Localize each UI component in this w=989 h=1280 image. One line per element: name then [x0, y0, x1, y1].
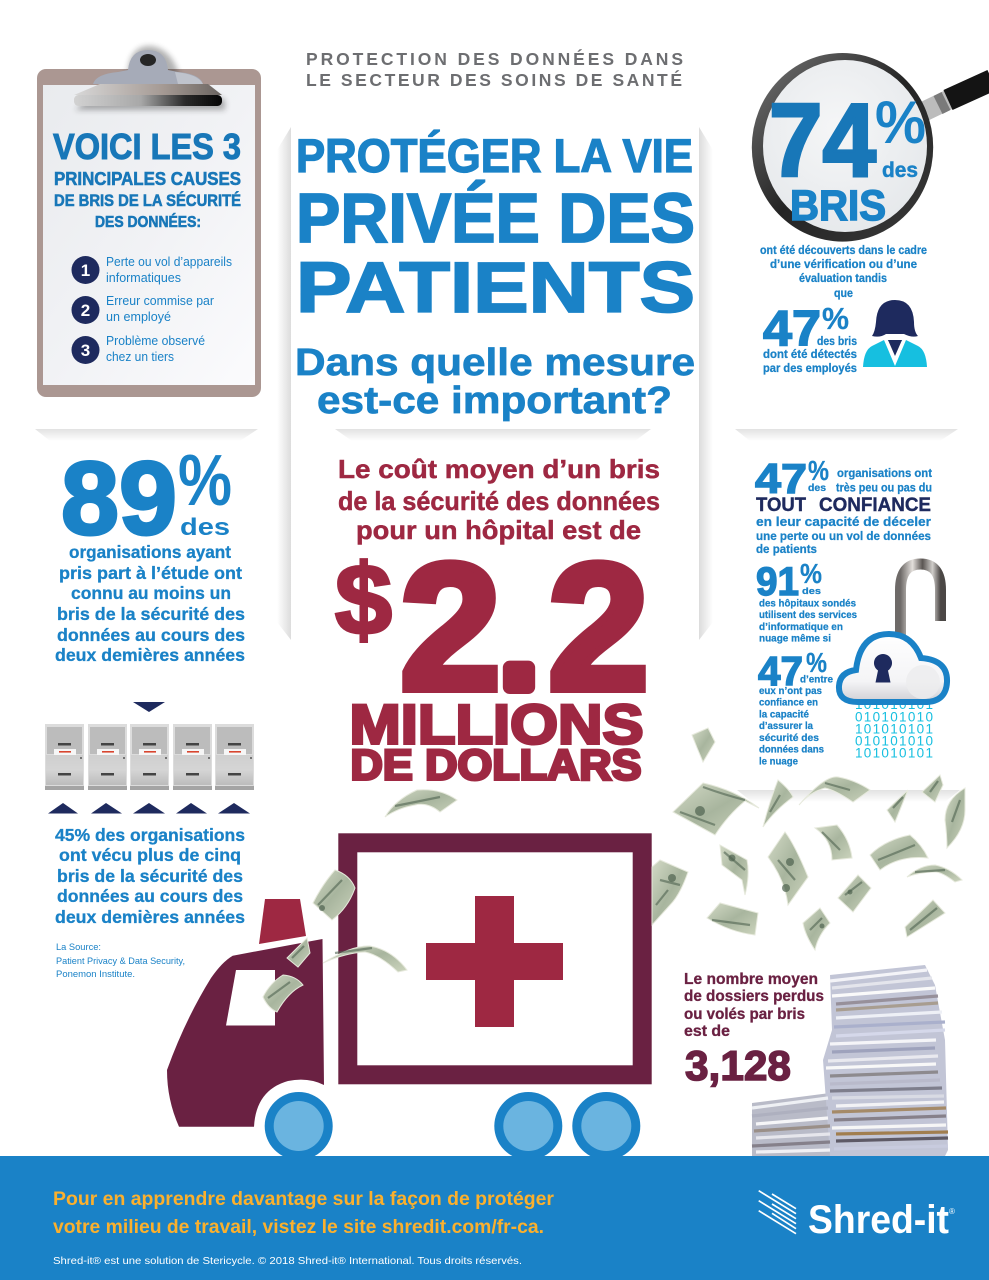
panel: 91% hospitals: des: [802, 586, 821, 597]
binary data: 010101010: [855, 734, 933, 748]
subtitle: [295, 342, 695, 422]
de dollars: DE DOLLARS: [350, 742, 642, 790]
paragraph: connu au moins un: [71, 583, 231, 603]
clipboard board: [37, 69, 261, 397]
stat: 47% detected by employees: des bris: [817, 336, 857, 348]
text: average lost records: Le nombre moyen: [684, 971, 818, 988]
binary data: 101010101: [855, 697, 933, 712]
magnifier handle: [925, 80, 989, 111]
clipboard heading: VOICI LES 3: [53, 126, 241, 167]
cause 3: 3: [81, 341, 90, 360]
footer legal: Shred-it® est une solution de Stericycle. © 2018 Shred-it® International. Tous droits réservés.: [53, 1255, 522, 1267]
Shred-it logo: [759, 1191, 955, 1242]
text: average lost records: de dossiers perdus: [684, 988, 824, 1005]
text: average lost records: est de: [684, 1023, 730, 1040]
cab: [167, 939, 324, 1127]
footer call to action: [53, 1189, 555, 1238]
main title: PATIENTS: [296, 249, 695, 328]
cause 1: 1: [81, 261, 90, 280]
red cross: [426, 896, 563, 1027]
cloud: [839, 634, 947, 702]
cost intro: de la sécurité des données: [338, 486, 660, 516]
text: 45% of organisations: bris de la sécurité des: [57, 866, 243, 886]
panel: cost of a breach: [335, 454, 660, 790]
magnifier lens: [752, 53, 933, 242]
arrows up: [48, 803, 250, 814]
panel: 47% cloud confidence: confiance en: [759, 696, 818, 708]
panel: 47% cloud confidence: %: [806, 647, 827, 678]
text: breaches discovered in audit: que: [834, 288, 853, 300]
main title: PROTÉGER LA VIE: [296, 129, 693, 182]
panel: 47% confidence: des: [808, 482, 826, 494]
cause 3: Problème observé: [106, 333, 205, 348]
icon: ambulance truck: [167, 833, 652, 1160]
panel: 47% confidence: CONFIANCE: [819, 494, 931, 516]
percent sign: %: [178, 441, 232, 521]
stat number 89: 89: [61, 441, 177, 557]
top heading: PROTECTION DES DONNÉES DANS: [306, 48, 683, 69]
panel: 47% cloud confidence: la capacité: [759, 708, 809, 720]
value 2.2: .: [501, 569, 537, 715]
panel: 47% cloud confidence: données dans: [759, 744, 824, 756]
subtitle: est-ce important?: [317, 380, 672, 422]
panel: 47% cloud confidence: [758, 647, 833, 768]
text: breaches discovered in audit: évaluation tandis: [799, 273, 887, 285]
stat: 74%: BRIS: [790, 182, 886, 230]
subtitle: Dans quelle mesure: [295, 342, 695, 384]
binary data: 101010101: [855, 746, 933, 760]
panel: 91% hospitals: nuage même si: [759, 632, 831, 644]
stat: 47% detected by employees: 47: [763, 300, 821, 356]
panel: 47% cloud confidence: sécurité des: [759, 732, 819, 744]
label des: des: [180, 514, 230, 541]
clipboard clip: [74, 46, 225, 110]
text: average lost records: [684, 971, 824, 1040]
clipboard heading: DE BRIS DE LA SÉCURITÉ: [54, 191, 241, 210]
cost intro: [338, 454, 660, 545]
stat: 47% detected by employees: [763, 300, 857, 375]
panel: 91% hospitals: 91: [756, 560, 799, 604]
panel: clipboard with 3 causes: [37, 46, 261, 397]
text: breaches discovered in audit: d’une vérification ou d’une: [770, 259, 917, 271]
source note: Patient Privacy & Data Security,: [56, 956, 185, 967]
stat: 47% detected by employees: %: [822, 301, 849, 336]
paragraph: organisations ayant: [69, 542, 231, 562]
panel: 47% cloud confidence: eux n’ont pas: [759, 685, 822, 697]
cost intro: pour un hôpital est de: [356, 515, 641, 545]
cause 2: 2: [81, 301, 90, 320]
text: 45% of organisations: deux demières années: [55, 907, 245, 927]
cabinets: [45, 724, 254, 790]
top heading: [306, 48, 683, 90]
source note: La Source:: [56, 942, 101, 953]
cause 1: [72, 254, 232, 285]
icon: employee: [863, 300, 927, 367]
stat: 74%: %: [875, 89, 926, 156]
dollar sign: $: [335, 544, 392, 656]
panel: 47% cloud confidence: le nuage: [759, 756, 798, 768]
panel: 91% hospitals: %: [800, 558, 822, 589]
cause 3: [72, 333, 205, 364]
panel shadows: [35, 127, 960, 802]
icon: stacks of paper: [752, 965, 948, 1156]
cause 1: informatiques: [106, 270, 181, 285]
panel: 47% confidence: une perte ou un vol de données: [756, 529, 931, 543]
beacon light: [259, 899, 306, 944]
panel: 91% hospitals: [756, 558, 857, 644]
main title: [296, 129, 695, 328]
cause 1: Perte ou vol d’appareils: [106, 254, 232, 269]
icon: cloud padlock with binary data: [839, 564, 947, 760]
paragraph: [55, 542, 245, 665]
text: average lost records: ou volés par bris: [684, 1006, 805, 1023]
cause 2: [72, 293, 215, 324]
binary data: [855, 697, 933, 760]
top heading: LE SECTEUR DES SOINS DE SANTÉ: [306, 69, 682, 90]
millions: MILLIONS: [350, 692, 644, 756]
panel: 47% cloud confidence: d’entre: [800, 674, 833, 686]
stat: 47% detected by employees: dont été détectés: [763, 349, 857, 361]
cause 3: chez un tiers: [106, 349, 174, 364]
Shred-it logo: Shred-it: [808, 1198, 949, 1242]
panel: 91% hospitals: utilisent des services: [759, 609, 857, 621]
paragraph: données au cours des: [57, 625, 245, 645]
paragraph: pris part à l’étude ont: [59, 563, 242, 583]
panel: 91% hospitals: des hôpitaux sondés: [759, 598, 856, 610]
clipboard heading: [53, 126, 241, 231]
value 2.2: [400, 527, 649, 728]
panel: 47% confidence: 47: [755, 455, 807, 502]
footer call to action: Pour en apprendre davantage sur la façon de protéger: [53, 1189, 555, 1210]
text: breaches discovered in audit: ont été découverts dans le cadre: [760, 245, 927, 257]
main title: PRIVÉE DES: [296, 179, 695, 257]
stat: 47% detected by employees: par des employés: [763, 363, 857, 375]
cab window: [226, 970, 275, 1026]
panel: 47% confidence: organisations ont: [837, 468, 932, 480]
text: breaches discovered in audit: [760, 245, 927, 300]
panel: 47% confidence: de patients: [756, 542, 817, 556]
panel: filing cabinets: [45, 702, 254, 814]
cause 2: Erreur commise par: [106, 293, 215, 308]
text: 45% of organisations: données au cours des: [57, 886, 243, 906]
source note: [56, 942, 185, 980]
text: 45% of organisations: [55, 825, 245, 927]
panel: 47% cloud confidence: 47: [758, 648, 803, 694]
panel: 47% confidence: TOUT: [756, 494, 806, 516]
keyhole: [874, 654, 892, 682]
binary data: 010101010: [855, 710, 933, 724]
panel: 47% cloud confidence: d’assurer la: [759, 720, 813, 732]
panel: 47% confidence: %: [808, 455, 829, 486]
footer call to action: votre milieu de travail, vistez le site shredit.com/fr-ca.: [53, 1217, 544, 1238]
cost intro: Le coût moyen d’un bris: [338, 454, 660, 484]
truck box: [338, 833, 652, 1084]
panel: 47% confidence: [755, 455, 932, 556]
text: 45% of organisations: ont vécu plus de cinq: [59, 845, 241, 865]
Shred-it logo: ®: [949, 1207, 955, 1216]
stat: 3,128 records: 3,128: [685, 1042, 791, 1089]
clipboard heading: DES DONNÉES:: [95, 214, 201, 231]
wheels: [265, 1092, 640, 1160]
text: 45% of organisations: 45% des organisations: [55, 825, 245, 845]
panel: 89% stat: [55, 441, 245, 665]
panel: magnifying glass 74%: [752, 53, 989, 242]
falling money: [263, 728, 965, 1012]
binary data: 101010101: [855, 722, 933, 736]
panel: 91% hospitals: d’informatique en: [759, 621, 843, 633]
clipboard paper: [43, 85, 255, 385]
panel: 47% confidence: très peu ou pas du: [836, 482, 932, 494]
footer band: [0, 1156, 989, 1280]
panel: 47% confidence: en leur capacité de déceler: [756, 514, 931, 529]
cause 2: un employé: [106, 309, 171, 324]
value 2.2: 2: [400, 527, 501, 728]
clipboard heading: PRINCIPALES CAUSES: [54, 169, 241, 189]
arrow down: [133, 702, 165, 712]
source note: Ponemon Institute.: [56, 969, 135, 980]
value 2.2: 2: [548, 527, 649, 728]
stat: 74%: [769, 83, 926, 230]
paragraph: deux demières années: [55, 645, 245, 665]
paragraph: bris de la sécurité des: [57, 604, 245, 624]
stat: 74%: 74: [769, 83, 876, 199]
open shackle: [900, 564, 940, 635]
stat: 74%: des: [882, 159, 918, 182]
